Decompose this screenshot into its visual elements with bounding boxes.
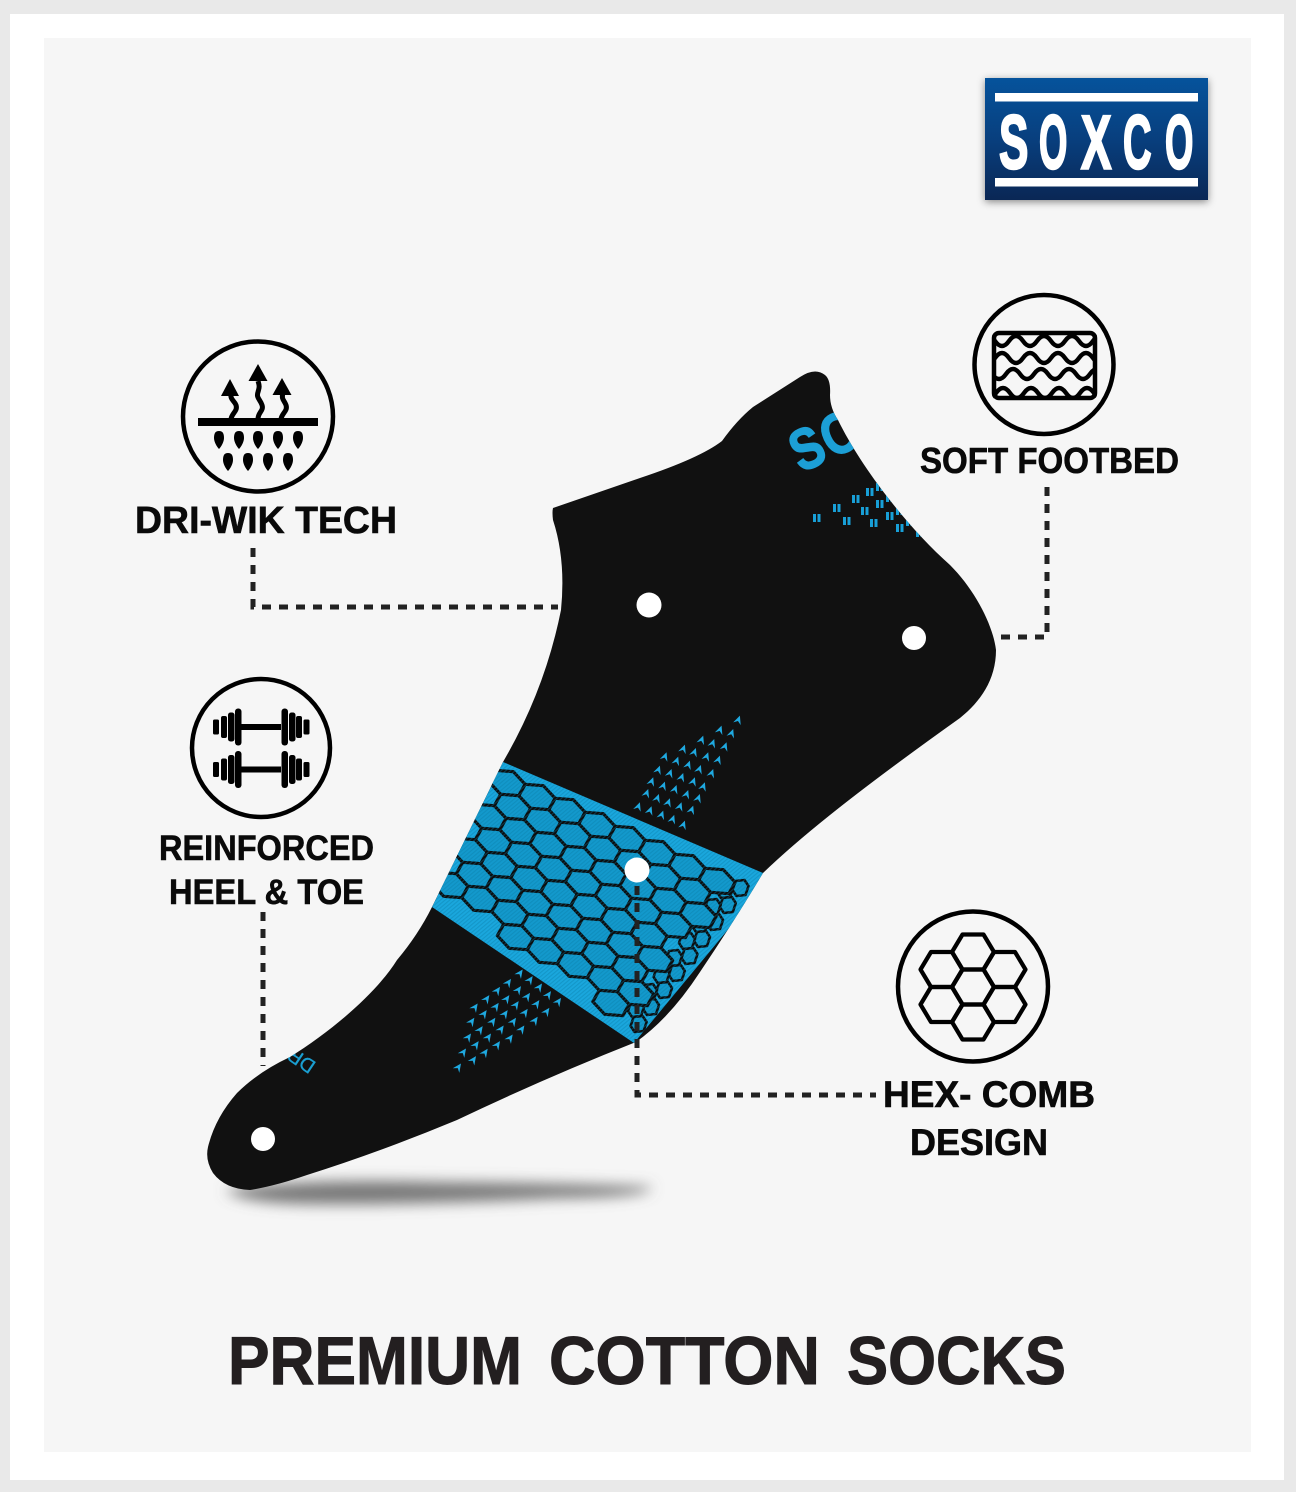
title: PREMIUM bbox=[228, 1323, 522, 1399]
icon: dri-wik moisture bbox=[183, 342, 333, 492]
logo: SOXCO: O bbox=[1039, 100, 1067, 185]
marker dot: soft footbed bbox=[902, 626, 926, 650]
leader line: soft footbed bbox=[995, 487, 1047, 637]
logo: SOXCO: C bbox=[1123, 99, 1152, 185]
label: dri-wik tech: DRI-WIK TECH bbox=[135, 500, 397, 542]
sock pattern: blue honeycomb band bbox=[432, 762, 763, 1043]
sock illustration bbox=[207, 350, 996, 1190]
marker dot: dri-wik bbox=[636, 592, 662, 618]
label: reinforced heel and toe bbox=[159, 829, 374, 912]
icon: reinforced dumbbells bbox=[192, 679, 330, 817]
title: COTTON bbox=[549, 1323, 820, 1399]
label: hex-comb design: DESIGN bbox=[910, 1122, 1048, 1163]
icon: hex-comb bbox=[898, 912, 1048, 1062]
logo: SOXCO: S bbox=[999, 101, 1028, 186]
label: hex-comb design: HEX- COMB bbox=[883, 1074, 1095, 1115]
sock tab brand text: SOXCO bbox=[779, 350, 970, 485]
sock pattern: lower arrow field bbox=[453, 967, 564, 1073]
sock tab brand text bbox=[242, 350, 970, 1077]
logo: SOXCO: X bbox=[1081, 101, 1112, 185]
label: reinforced heel and toe: HEEL & TOE bbox=[169, 873, 364, 912]
sock tab dots bbox=[813, 487, 925, 533]
sock shadow bbox=[225, 1181, 652, 1204]
marker dot: toe bbox=[251, 1127, 275, 1151]
label: soft footbed: SOFT FOOTBED bbox=[920, 440, 1179, 481]
title bbox=[228, 1323, 1066, 1399]
label: reinforced heel and toe: REINFORCED bbox=[159, 829, 374, 868]
logo: SOXCO bbox=[985, 78, 1208, 202]
marker dot: hex-comb bbox=[624, 858, 650, 882]
toe brand text: DRI-WIK bbox=[242, 1014, 320, 1077]
icon: soft footbed bbox=[974, 295, 1121, 434]
sock body bbox=[207, 371, 996, 1190]
leader line: hex-comb bbox=[637, 886, 876, 1095]
logo: SOXCO: O bbox=[1165, 100, 1193, 185]
sock pattern: upper arrow field bbox=[633, 714, 744, 830]
label: hex-comb design bbox=[883, 1074, 1095, 1163]
leader line: reinforced bbox=[260, 912, 266, 1066]
leader line: dri-wik bbox=[253, 548, 558, 607]
title: SOCKS bbox=[847, 1323, 1066, 1399]
